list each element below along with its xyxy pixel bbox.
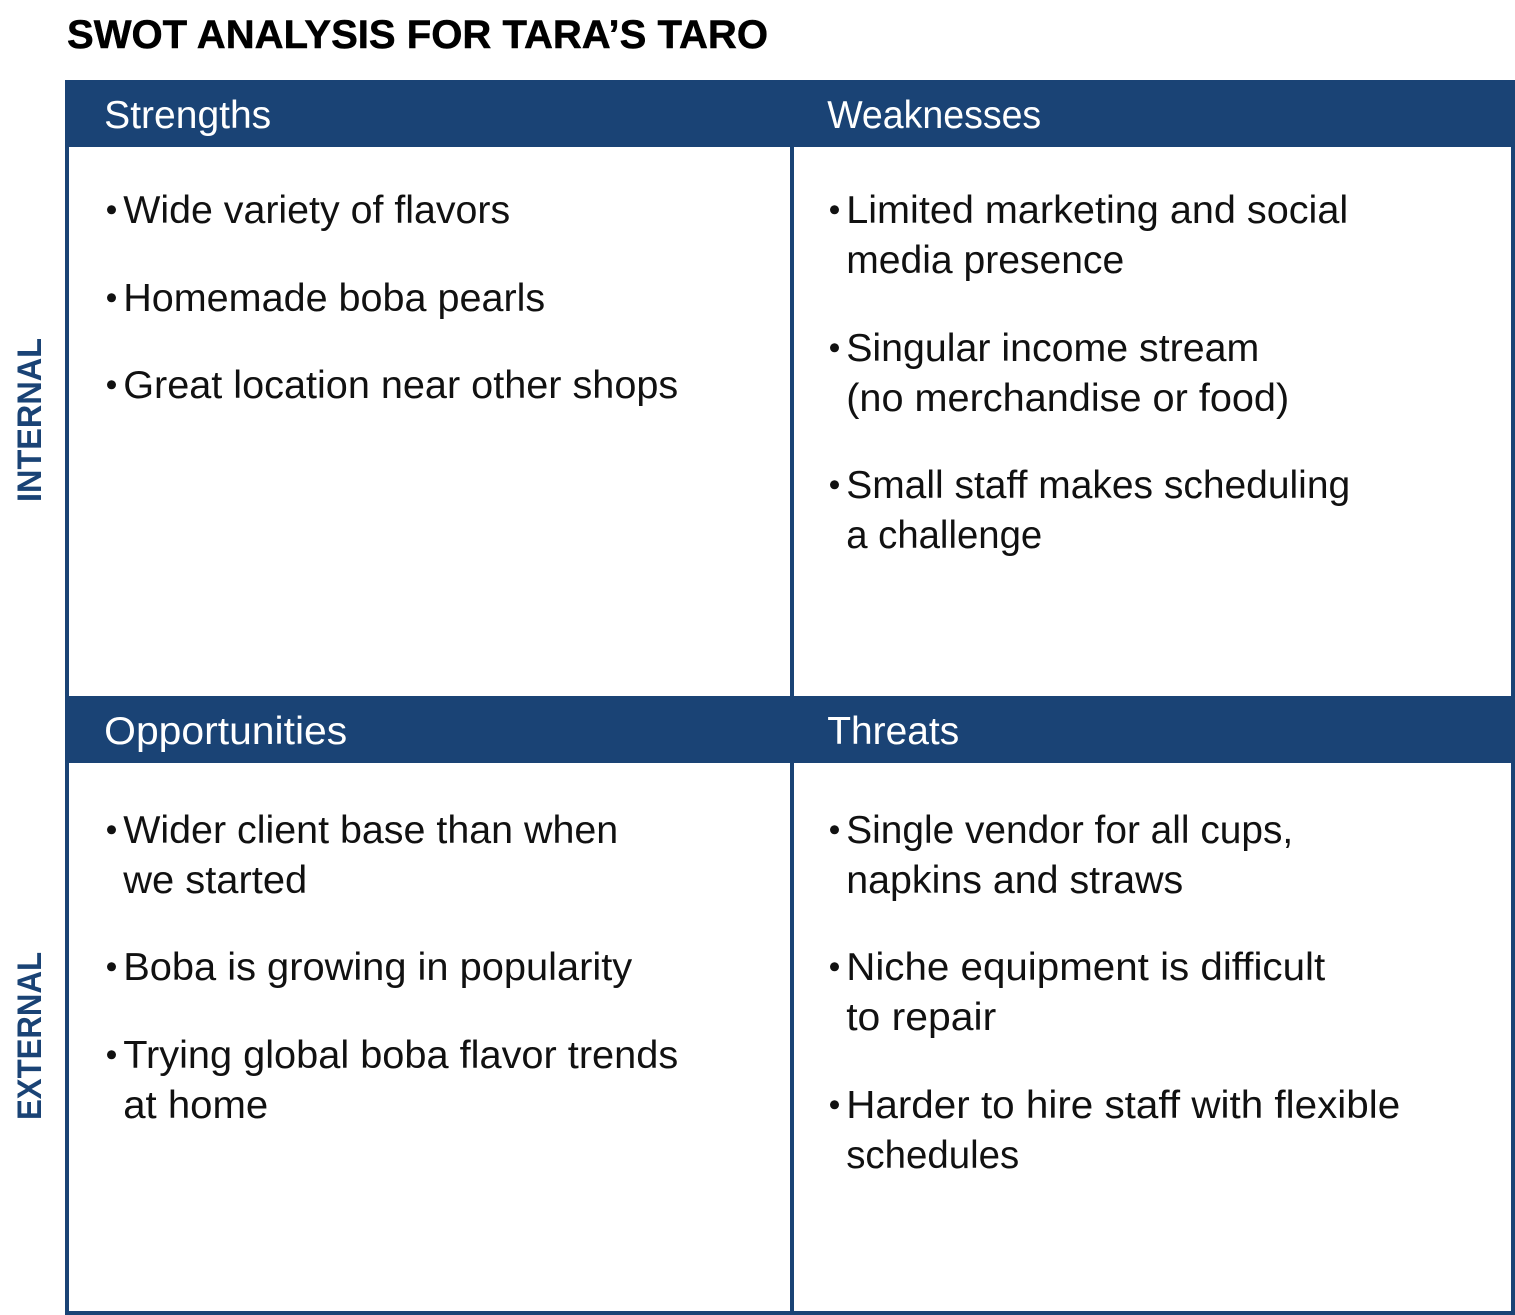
list: opportunities: Wider client base than when bbox=[123, 809, 618, 852]
list: strengths: Wide variety of flavors bbox=[123, 189, 510, 232]
list: threats: napkins and straws bbox=[846, 859, 1183, 902]
list: opportunities: we started bbox=[122, 859, 307, 902]
list: weaknesses: Small staff makes scheduling bbox=[846, 464, 1350, 507]
list: strengths bbox=[107, 189, 678, 407]
list: opportunities: at home bbox=[123, 1084, 268, 1127]
list: weaknesses bbox=[830, 189, 1350, 557]
panel: weaknesses bbox=[790, 80, 1515, 698]
list: weaknesses: (no merchandise or food) bbox=[846, 377, 1289, 420]
list: threats: Niche equipment is difficult bbox=[846, 946, 1325, 989]
panel: opportunities bbox=[65, 696, 794, 1313]
panel: strengths bbox=[65, 80, 794, 698]
title: SWOT ANALYSIS FOR TARA’S TARO bbox=[67, 13, 768, 57]
list: threats: Single vendor for all cups, bbox=[846, 809, 1293, 852]
side label: external: EXTERNAL bbox=[11, 952, 49, 1120]
side label: internal: INTERNAL bbox=[11, 338, 49, 502]
list: opportunities bbox=[107, 809, 678, 1127]
panel: threats bbox=[790, 696, 1515, 1313]
heading: opportunities: Opportunities bbox=[104, 710, 347, 753]
list: threats: schedules bbox=[846, 1134, 1019, 1177]
list: threats bbox=[830, 809, 1400, 1177]
heading: strengths: Strengths bbox=[104, 94, 271, 137]
heading: weaknesses: Weaknesses bbox=[827, 94, 1041, 137]
list: threats: Harder to hire staff with flexible bbox=[846, 1084, 1400, 1127]
list: threats: to repair bbox=[846, 996, 996, 1039]
list: opportunities: Trying global boba flavor trends bbox=[123, 1034, 678, 1077]
heading: threats: Threats bbox=[827, 710, 959, 753]
list: weaknesses: Singular income stream bbox=[846, 327, 1259, 370]
list: strengths: Great location near other shops bbox=[123, 364, 678, 407]
list: weaknesses: Limited marketing and social bbox=[846, 189, 1348, 232]
list: opportunities: Boba is growing in popularity bbox=[123, 946, 633, 989]
list: strengths: Homemade boba pearls bbox=[123, 277, 545, 320]
list: weaknesses: a challenge bbox=[846, 514, 1042, 557]
list: weaknesses: media presence bbox=[846, 239, 1124, 282]
